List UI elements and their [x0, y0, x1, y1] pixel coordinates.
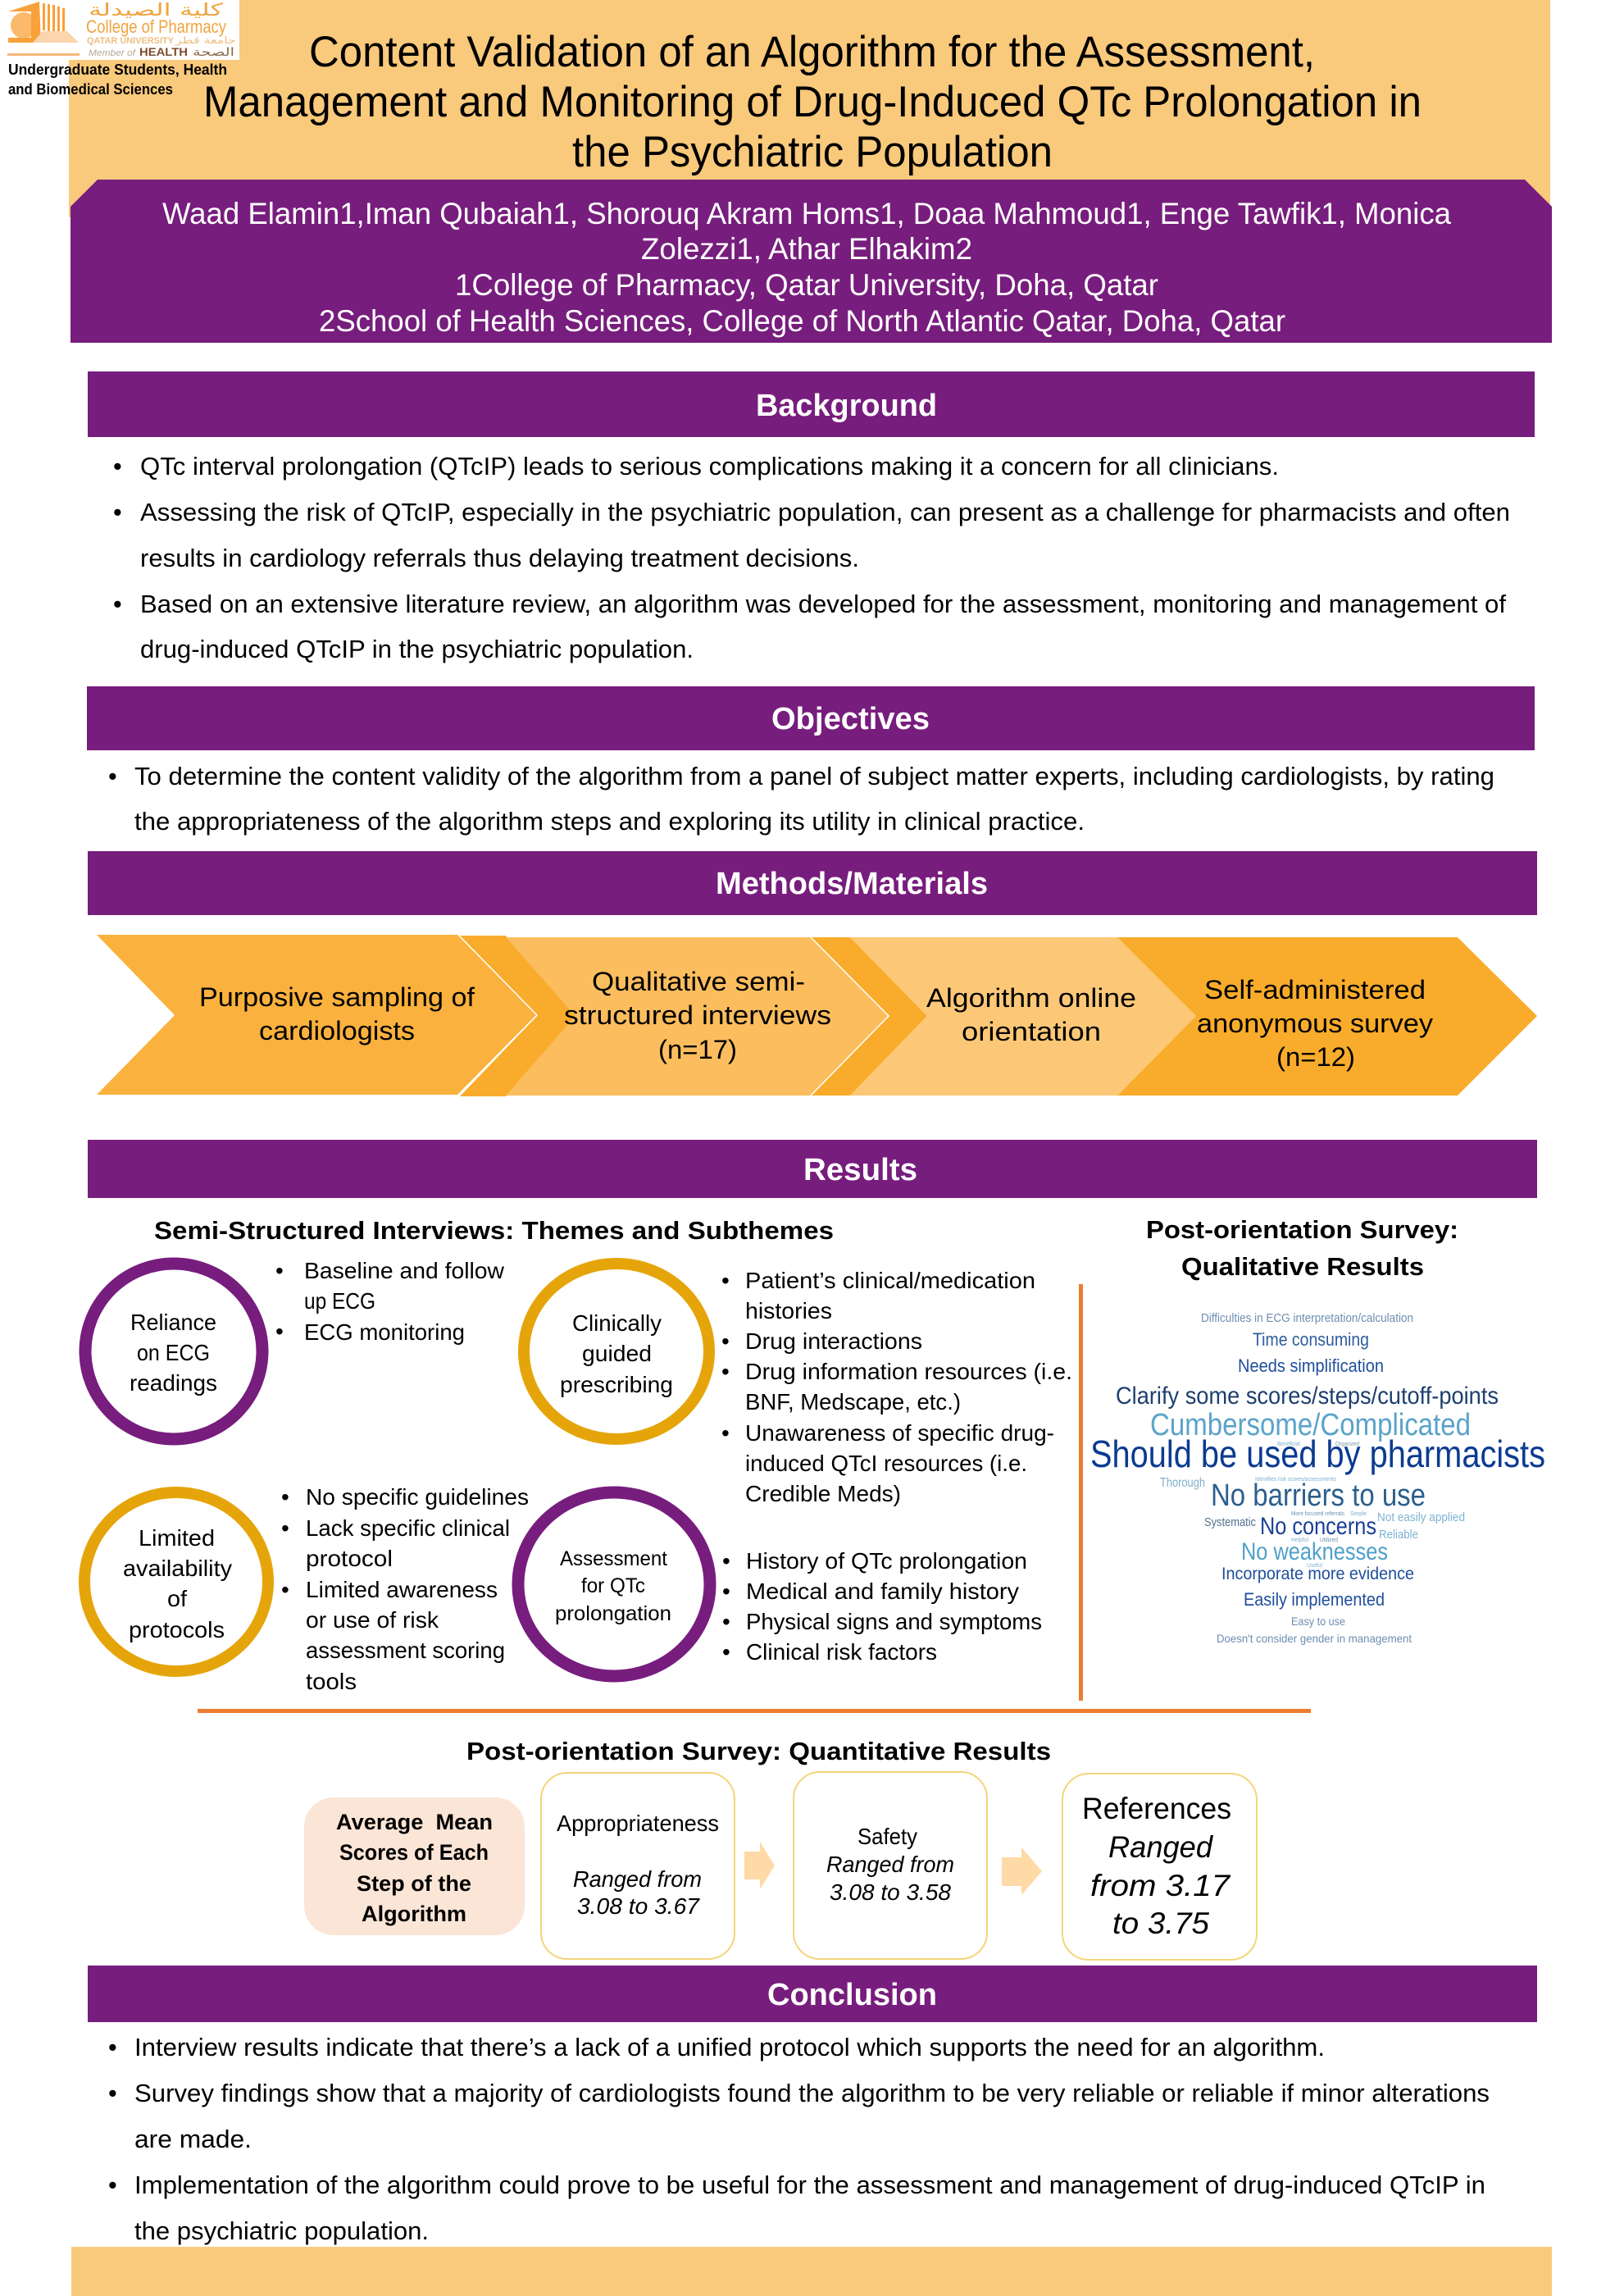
logo: College of Pharmacy: جامعة قطر	[175, 34, 236, 47]
background bullet text: •	[113, 499, 122, 526]
theme circle: reliance on ECG: on ECG	[137, 1340, 210, 1365]
subtheme list: ECG	[275, 1258, 505, 1345]
subtheme list: assessment: •	[722, 1639, 730, 1665]
subheading: semi-structured interviews: Semi-Structured Interviews: Themes and Subthemes	[154, 1216, 834, 1245]
theme circle: limited availability: protocols	[129, 1617, 225, 1642]
logo: College of Pharmacy: HEALTH	[139, 45, 188, 58]
word cloud: Needs simplification	[1238, 1355, 1384, 1376]
objectives bullet text: the appropriateness of the algorithm steps and exploring its utility in clinical practice.	[134, 808, 1085, 836]
word cloud: Systematic	[1204, 1515, 1256, 1529]
chevron: online orientation: Algorithm online	[926, 983, 1136, 1013]
background bullet text: results in cardiology referrals thus delaying treatment decisions.	[140, 544, 859, 572]
logo: College of Pharmacy: College of Pharmacy	[86, 16, 226, 37]
arrow: to safety	[744, 1842, 775, 1889]
score card: appropriateness	[541, 1773, 735, 1959]
score label box: Algorithm	[362, 1902, 466, 1926]
subheading: qualitative results: Qualitative Results	[1181, 1252, 1424, 1281]
chevron: anonymous survey: (n=12)	[1276, 1042, 1355, 1072]
word cloud	[1090, 1311, 1545, 1645]
objectives bullet text: •	[108, 763, 117, 790]
title: Management and Monitoring of Drug-Induced QTc Prolongation in	[203, 78, 1422, 126]
chevron: purposive sampling	[97, 935, 575, 1096]
subtheme list: assessment	[722, 1548, 1042, 1665]
logo: College of Pharmacy	[0, 0, 239, 60]
score card: appropriateness: Ranged from	[573, 1866, 702, 1892]
conclusion bullet text: Survey findings show that a majority of cardiologists found the algorithm to be very reliable or reliable if minor alterations	[134, 2080, 1490, 2107]
subheading: qualitative results: Post-orientation Survey:	[1146, 1215, 1458, 1244]
heading: Objectives: Objectives	[771, 702, 930, 736]
subtheme list: assessment: Medical and family history	[746, 1578, 1019, 1604]
subtheme list: ECG: •	[275, 1258, 284, 1283]
subtheme list: protocols	[281, 1484, 529, 1694]
conclusion bullet text: are made.	[134, 2125, 252, 2153]
word cloud: Should be used by pharmacists	[1090, 1433, 1545, 1475]
subtheme list: protocols: •	[281, 1515, 289, 1541]
word cloud: Utilized	[1320, 1538, 1338, 1543]
theme circle: assessment for QTc	[518, 1492, 710, 1676]
word cloud: Thorough	[1160, 1476, 1205, 1490]
word cloud: Identifies risk scores/assessments	[1255, 1477, 1336, 1483]
subtheme list: prescribing	[721, 1268, 1072, 1506]
background bullet text: QTc interval prolongation (QTcIP) leads to serious complications making it a concern for all clinicians.	[140, 453, 1279, 481]
score card: references: References	[1082, 1792, 1231, 1825]
score label box	[304, 1797, 525, 1935]
chevron: online orientation: orientation	[962, 1017, 1101, 1046]
theme circle: limited availability: availability	[123, 1556, 232, 1581]
subtheme list: assessment: Clinical risk factors	[746, 1639, 937, 1665]
authors and affiliations	[162, 197, 1451, 338]
theme circle: limited availability: Limited	[139, 1525, 215, 1551]
theme circle: clinically guided prescribing: prescribing	[560, 1372, 673, 1397]
score card: references: Ranged	[1108, 1830, 1213, 1864]
subheading: qualitative results	[1146, 1215, 1458, 1281]
subtheme list: assessment: •	[722, 1609, 730, 1634]
subtheme list: prescribing: Drug interactions	[745, 1328, 922, 1354]
objectives bullet text	[108, 763, 1494, 836]
theme circle: reliance on ECG: Reliance	[130, 1310, 216, 1335]
word cloud: Doesn't consider gender in management	[1217, 1632, 1412, 1645]
institution label: Undergraduate Students, Health	[8, 61, 227, 78]
score label box: Average Mean	[336, 1810, 493, 1834]
logo: College of Pharmacy: كلية الصيدلة	[89, 0, 223, 20]
word cloud: No barriers to use	[1211, 1478, 1426, 1513]
score card: references: from 3.17	[1090, 1869, 1231, 1902]
conclusion bullet text: Implementation of the algorithm could prove to be useful for the assessment and management of drug-induced QTcIP in	[134, 2171, 1485, 2199]
authors and affiliations: Zolezzi1, Athar Elhakim2	[641, 232, 972, 266]
chevron: qualitative interviews: structured interviews	[564, 1000, 831, 1030]
subtheme list: protocols: Lack specific clinical	[306, 1515, 510, 1541]
word cloud: Easily implemented	[1244, 1589, 1385, 1610]
word cloud: No concerns	[1260, 1513, 1376, 1540]
subtheme list: ECG: Baseline and follow	[304, 1258, 505, 1283]
conclusion bullet text: •	[108, 2080, 117, 2107]
subtheme list: prescribing: Unawareness of specific drug-	[745, 1420, 1054, 1446]
word cloud: Incorporate more evidence	[1221, 1565, 1414, 1583]
score card: safety: Ranged from	[826, 1852, 954, 1877]
theme circle: clinically guided prescribing: Clinically	[572, 1310, 662, 1336]
word cloud: Cumbersome/Complicated	[1150, 1408, 1471, 1442]
subtheme list: prescribing: Credible Meds)	[745, 1481, 901, 1506]
word cloud: Organized	[1335, 1442, 1359, 1447]
subtheme list: assessment: History of QTc prolongation	[746, 1548, 1027, 1574]
arrow: to references	[1002, 1847, 1042, 1895]
heading: Methods/Materials: Methods/Materials	[716, 867, 988, 901]
subtheme list: prescribing: Drug information resources (i.e.	[745, 1359, 1072, 1384]
chevron: qualitative interviews	[506, 937, 927, 1096]
subtheme list: protocols: or use of risk	[306, 1607, 439, 1633]
subtheme list: ECG: ECG monitoring	[304, 1319, 465, 1345]
institution label	[8, 61, 227, 98]
word cloud: Useful	[1307, 1563, 1322, 1569]
header banner	[69, 0, 1552, 343]
subtheme list: prescribing: •	[721, 1359, 730, 1384]
word cloud: Easy to use	[1291, 1615, 1345, 1628]
heading: Objectives	[87, 686, 1535, 750]
subtheme list: protocols: Limited awareness	[306, 1577, 498, 1602]
chevron: anonymous survey	[1117, 937, 1537, 1096]
heading: Results	[88, 1140, 1537, 1198]
chevron: qualitative interviews: Qualitative semi-	[592, 967, 805, 996]
footer band	[71, 2247, 1552, 2296]
title: the Psychiatric Population	[572, 128, 1053, 176]
background bullet text: •	[113, 453, 122, 481]
word cloud: Simple	[1350, 1511, 1367, 1517]
score label box: Scores of Each	[339, 1840, 489, 1865]
subtheme list: assessment: •	[722, 1548, 730, 1574]
conclusion bullet text: Interview results indicate that there’s a lack of a unified protocol which supports the need for an algorithm.	[134, 2034, 1325, 2061]
authors and affiliations: Waad Elamin1,Iman Qubaiah1, Shorouq Akram Homs1, Doaa Mahmoud1, Enge Tawfik1, Monica	[162, 197, 1451, 230]
subtheme list: prescribing: histories	[745, 1298, 832, 1323]
subtheme list: protocols: assessment scoring	[306, 1638, 505, 1663]
conclusion bullet text	[108, 2034, 1490, 2245]
title	[203, 28, 1422, 176]
chevron: purposive sampling: Purposive sampling of	[199, 982, 475, 1012]
word cloud: Clarify some scores/steps/cutoff-points	[1116, 1383, 1499, 1410]
theme circle: clinically guided prescribing: guided	[582, 1341, 652, 1366]
subheading: quantitative results: Post-orientation Survey: Quantitative Results	[466, 1737, 1051, 1765]
theme circle: clinically guided prescribing	[524, 1264, 709, 1439]
chevron: qualitative interviews: (n=17)	[658, 1035, 737, 1064]
theme circle: assessment for QTc: for QTc	[581, 1574, 645, 1597]
subtheme list: protocols: tools	[306, 1669, 357, 1694]
theme circle: assessment for QTc: Assessment	[560, 1547, 667, 1570]
score card: references	[1062, 1774, 1257, 1960]
score card: appropriateness: 3.08 to 3.67	[577, 1893, 700, 1919]
background bullet text: drug-induced QTcIP in the psychiatric population.	[140, 636, 694, 663]
background bullet text	[113, 453, 1510, 663]
word cloud: Time consuming	[1253, 1329, 1369, 1350]
background bullet text: Assessing the risk of QTcIP, especially in the psychiatric population, can present as a challenge for pharmacists and often	[140, 499, 1510, 526]
word cloud: Not easily applied	[1377, 1510, 1465, 1524]
conclusion bullet text: •	[108, 2171, 117, 2199]
objectives bullet text: To determine the content validity of the algorithm from a panel of subject matter experts, including cardiologists, by rating	[134, 763, 1494, 790]
subtheme list: protocols: No specific guidelines	[306, 1484, 529, 1510]
subtheme list: assessment: Physical signs and symptoms	[746, 1609, 1042, 1634]
word cloud: More focused referrals	[1291, 1511, 1344, 1517]
word cloud: No weaknesses	[1241, 1538, 1388, 1565]
title: Content Validation of an Algorithm for the Assessment,	[309, 28, 1315, 76]
authors and affiliations: 2School of Health Sciences, College of North Atlantic Qatar, Doha, Qatar	[319, 304, 1285, 338]
theme circle: limited availability	[84, 1492, 268, 1671]
word cloud: Difficulties in ECG interpretation/calculation	[1201, 1311, 1413, 1325]
subtheme list: protocols: protocol	[306, 1546, 393, 1571]
process chevrons	[97, 935, 1537, 1096]
subtheme list: prescribing: BNF, Medscape, etc.)	[745, 1389, 961, 1414]
theme circle: limited availability: of	[167, 1586, 187, 1611]
chevron: anonymous survey: anonymous survey	[1197, 1009, 1433, 1038]
word cloud: Reliable	[1379, 1528, 1418, 1542]
heading: Background	[88, 371, 1535, 437]
heading: Conclusion	[88, 1966, 1537, 2022]
background bullet text: •	[113, 590, 122, 618]
chevron: online orientation	[850, 937, 1196, 1096]
institution label: and Biomedical Sciences	[8, 81, 173, 98]
logo: College of Pharmacy: QATAR UNIVERSITY	[87, 36, 175, 46]
theme circle: assessment for QTc: prolongation	[555, 1602, 671, 1625]
word cloud: Helpful	[1291, 1538, 1308, 1543]
heading: Results: Results	[803, 1153, 917, 1187]
score label box: Step of the	[357, 1871, 471, 1896]
heading: Methods/Materials	[88, 851, 1537, 915]
conclusion bullet text: •	[108, 2034, 117, 2061]
chevron: purposive sampling: cardiologists	[259, 1016, 415, 1046]
subtheme list: prescribing: •	[721, 1268, 730, 1293]
subtheme list: prescribing: •	[721, 1420, 730, 1446]
subtheme list: prescribing: induced QTcI resources (i.e.	[745, 1451, 1027, 1476]
subtheme list: protocols: •	[281, 1484, 289, 1510]
subtheme list: prescribing: •	[721, 1328, 730, 1354]
logo: College of Pharmacy: الصحة	[193, 46, 234, 59]
subtheme list: ECG: •	[275, 1319, 284, 1344]
conclusion bullet text: the psychiatric population.	[134, 2217, 429, 2245]
heading: Conclusion: Conclusion	[767, 1978, 937, 2012]
score card: appropriateness: Appropriateness	[557, 1811, 719, 1836]
theme circle: reliance on ECG: readings	[130, 1370, 217, 1396]
score card: safety: Safety	[857, 1824, 917, 1849]
subtheme list: protocols: •	[281, 1577, 289, 1602]
logo: College of Pharmacy: Member of	[89, 48, 136, 58]
score card: references: to 3.75	[1112, 1906, 1209, 1940]
score card: safety	[794, 1772, 987, 1959]
chevron: anonymous survey: Self-administered	[1204, 975, 1426, 1004]
score card: safety: 3.08 to 3.58	[830, 1879, 951, 1905]
heading: Background: Background	[756, 389, 937, 423]
subtheme list: assessment: •	[722, 1578, 730, 1604]
subtheme list: ECG: up ECG	[304, 1288, 375, 1314]
word cloud: Beneficial	[1277, 1442, 1300, 1447]
subtheme list: prescribing: Patient’s clinical/medication	[745, 1268, 1035, 1293]
theme circle: reliance on ECG	[85, 1264, 262, 1439]
authors and affiliations: 1College of Pharmacy, Qatar University, Doha, Qatar	[455, 268, 1158, 302]
background bullet text: Based on an extensive literature review, an algorithm was developed for the assessment, monitoring and management of	[140, 590, 1507, 618]
